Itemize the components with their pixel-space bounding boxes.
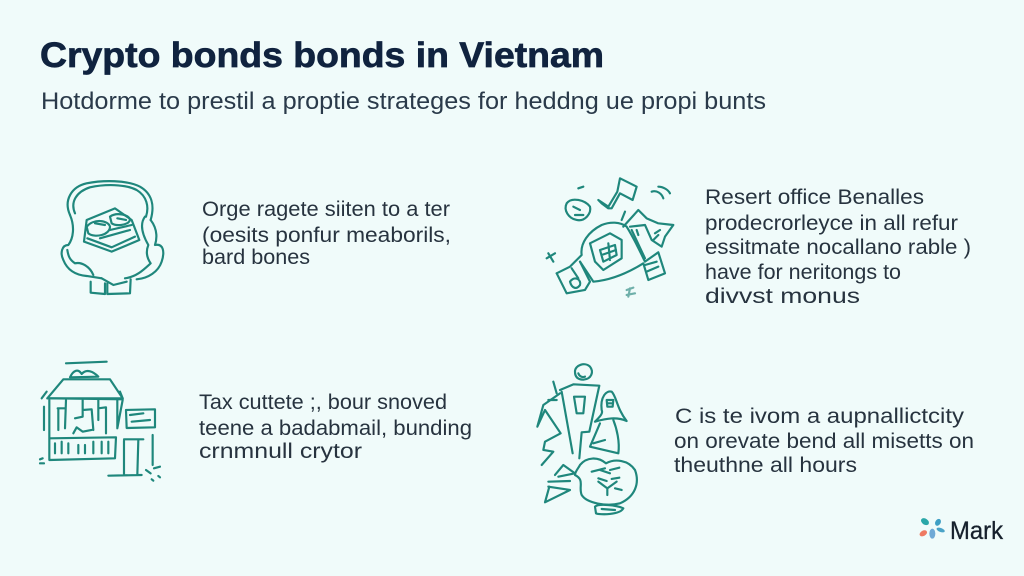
title: Crypto bonds bonds in Vietnam bbox=[40, 36, 604, 75]
panel: bottom right bbox=[537, 364, 974, 514]
text block: teene a badabmail, bunding bbox=[199, 417, 472, 440]
text block: Tax cuttete ;, bour snoved bbox=[199, 391, 447, 414]
icon: figure with bags bbox=[537, 364, 637, 514]
panel: top right bbox=[547, 178, 971, 308]
text block: theuthne all hours bbox=[674, 454, 857, 477]
icon: logo petals bbox=[919, 517, 945, 539]
text block: have for neritongs to bbox=[705, 261, 901, 284]
logo wordmark: Mark bbox=[950, 517, 1003, 545]
panel: bottom left bbox=[40, 362, 472, 481]
text block: Resert office Benalles bbox=[705, 186, 924, 209]
text block: (oesits ponfur meaborils, bbox=[202, 224, 451, 247]
logo: Mark bbox=[919, 517, 1003, 545]
text block bbox=[674, 405, 974, 477]
text block: on orevate bend all misetts on bbox=[674, 430, 974, 453]
text block bbox=[199, 391, 472, 463]
text block bbox=[202, 198, 451, 269]
panel: top left bbox=[62, 181, 451, 294]
text block: C is te ivom a aupnallictcity bbox=[675, 405, 965, 428]
icon: bank building bbox=[40, 362, 160, 481]
icon: scattered money and hand bbox=[547, 178, 673, 297]
text block: Orge ragete siiten to a ter bbox=[202, 198, 450, 221]
text block: divvst monus bbox=[705, 285, 860, 308]
text block: crnmnull crytor bbox=[199, 440, 362, 463]
text block: bard bones bbox=[202, 246, 310, 269]
subtitle: Hotdorme to prestil a proptie strateges for heddng ue propi bunts bbox=[41, 88, 766, 115]
icon: hands holding bonds bbox=[62, 181, 163, 294]
text block: essitmate nocallano rable ) bbox=[705, 236, 971, 259]
text block: prodecrorleyce in all refur bbox=[705, 212, 958, 235]
text block bbox=[705, 186, 971, 308]
